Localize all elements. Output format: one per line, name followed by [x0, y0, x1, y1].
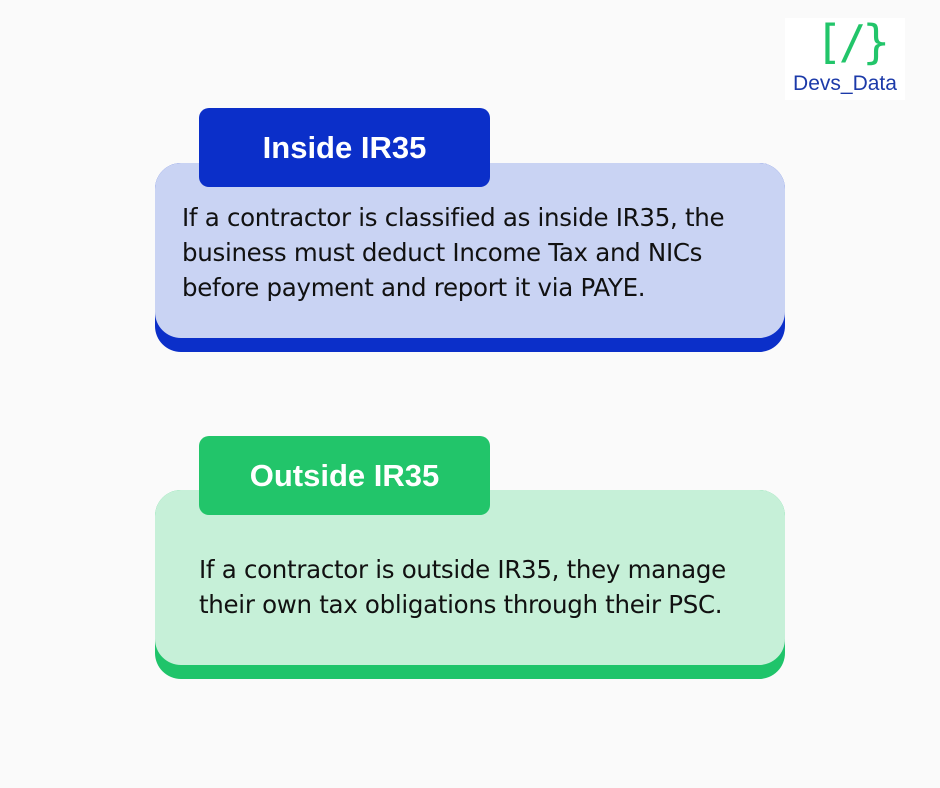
panel: outside IR35	[155, 490, 785, 679]
tab: outside IR35 heading	[199, 436, 490, 515]
logo text: Devs_Data	[793, 72, 897, 95]
logo	[785, 18, 905, 100]
tab: outside IR35 heading: Outside IR35	[250, 458, 439, 493]
tab: inside IR35 heading	[199, 108, 490, 187]
text: outside IR35 description: If a contractor is outside IR35, they manage their own tax obligations through their PSC.	[199, 555, 726, 619]
icon: code bracket: [/}	[815, 15, 886, 69]
panel: inside IR35	[155, 163, 785, 352]
tab: inside IR35 heading: Inside IR35	[263, 130, 426, 165]
text: inside IR35 description: If a contractor is classified as inside IR35, the business must deduct Income Tax and NICs before payment and report it via PAYE.	[182, 203, 724, 302]
